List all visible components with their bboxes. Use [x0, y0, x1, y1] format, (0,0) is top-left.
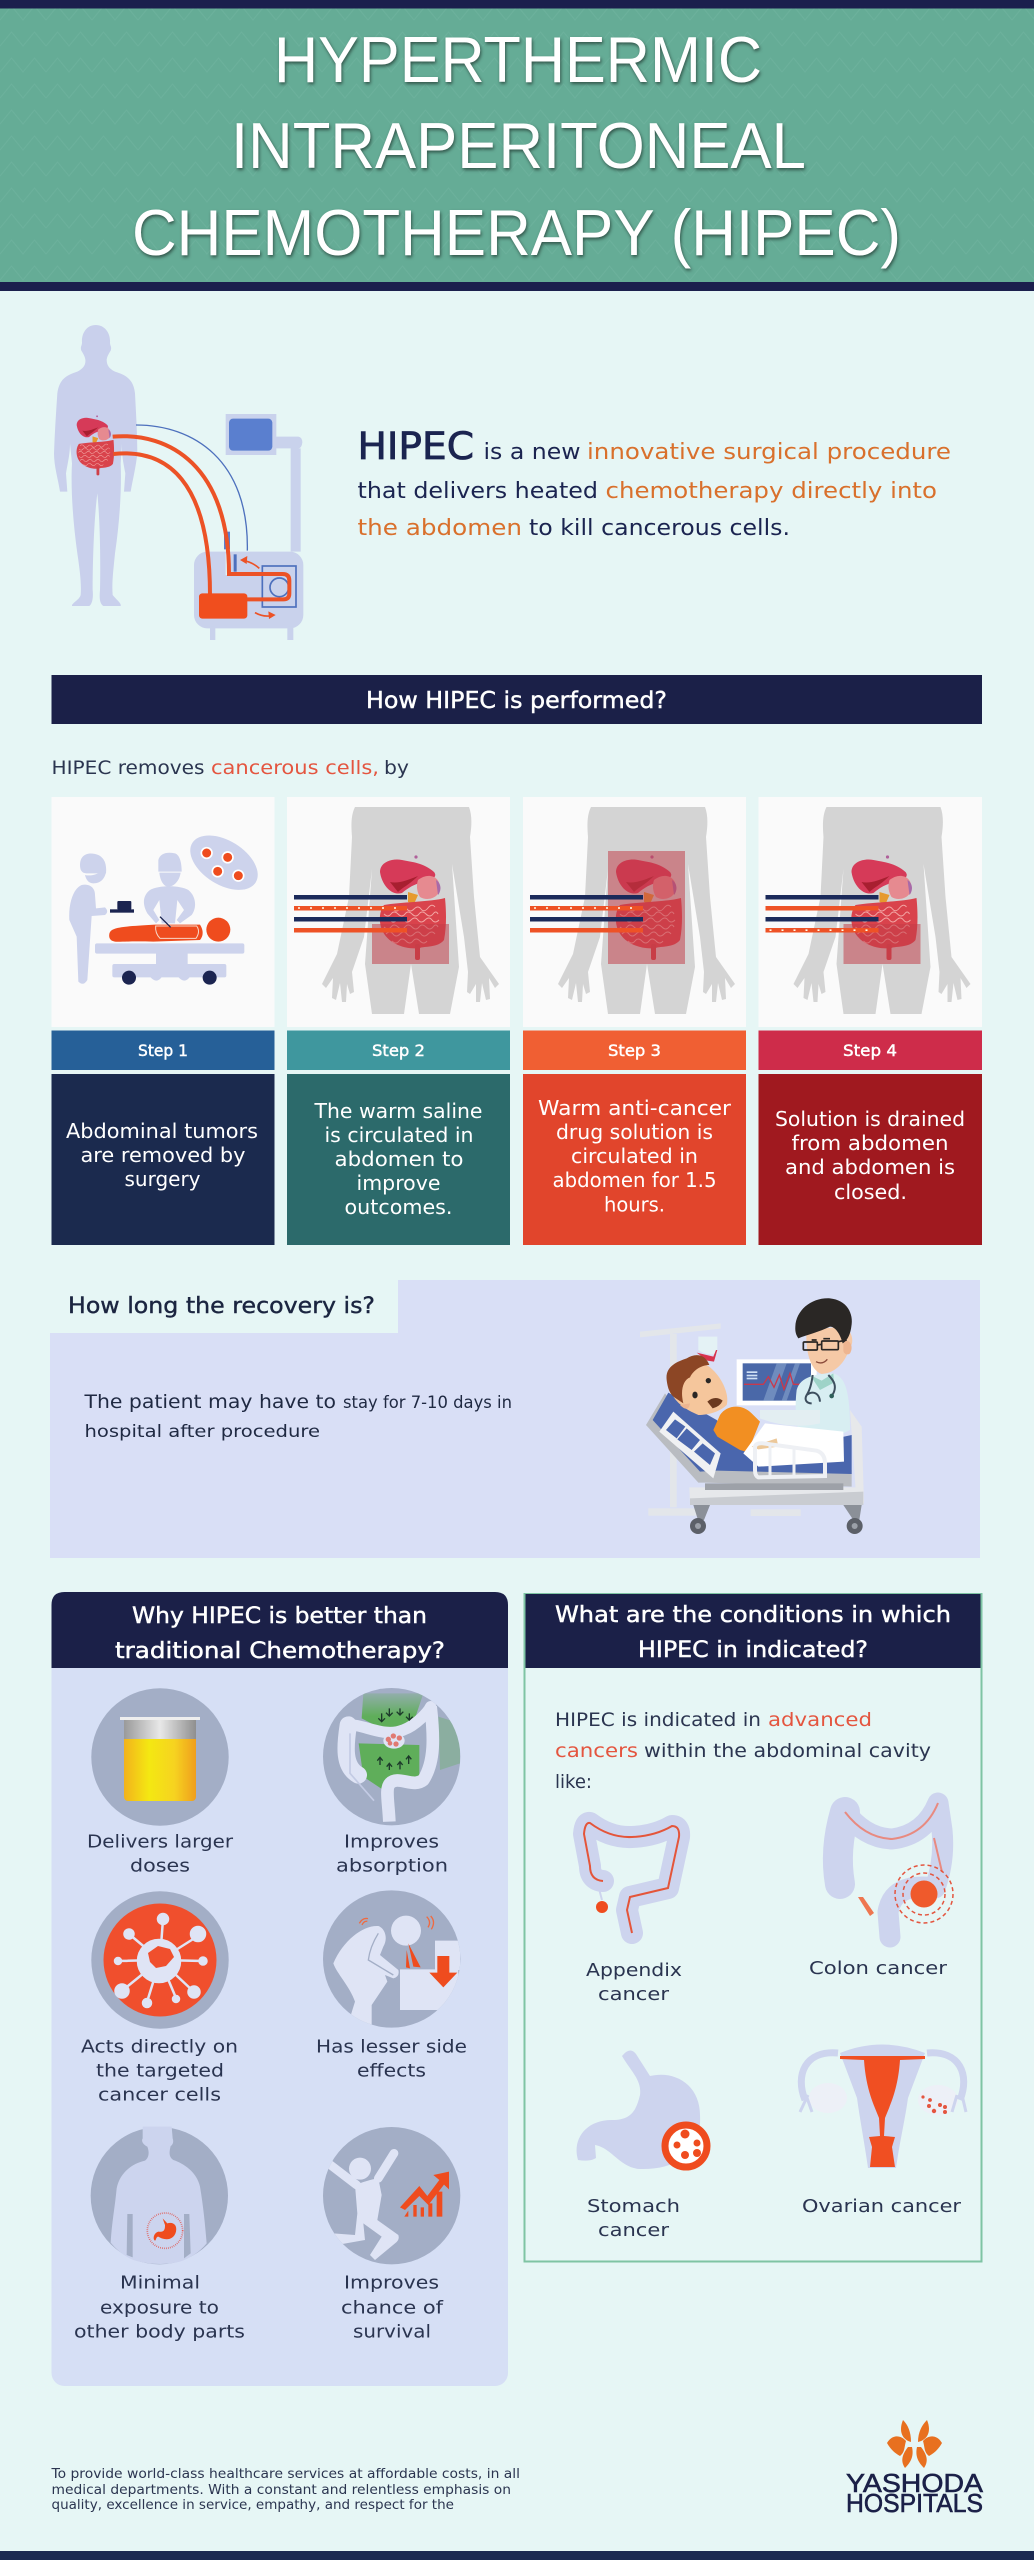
- step 4 card: from abdomen: [792, 1131, 948, 1155]
- recovery heading: How long the recovery is?: [68, 1294, 375, 1319]
- condition: colon cancer: [809, 1803, 953, 1979]
- step 4 card: and abdomen is: [785, 1155, 955, 1179]
- intro text: is a new: [484, 440, 581, 465]
- benefit: chance of survival: survival: [353, 2322, 431, 2342]
- intro text: cancers: [555, 1740, 638, 1762]
- recovery text: [83, 1391, 512, 1442]
- benefit: minimal exposure: other body parts: [74, 2322, 245, 2342]
- step 2 card: outcomes.: [344, 1195, 452, 1219]
- benefit: minimal exposure: Minimal: [120, 2272, 200, 2294]
- intro text: chemotherapy directly into: [606, 479, 937, 504]
- footer mission text: [50, 2466, 520, 2513]
- lead-in text: by: [384, 757, 409, 779]
- illustration: doctor and patient in bed: [640, 1298, 864, 1534]
- step 1 card: surgery: [124, 1167, 201, 1191]
- intro text: HIPEC is indicated in: [555, 1709, 761, 1731]
- panel heading: [52, 1592, 508, 1668]
- condition: appendix cancer: Appendix: [586, 1960, 682, 1981]
- title text: CHEMOTHERAPY (HIPEC): [132, 196, 901, 269]
- benefit: larger doses: [87, 1688, 234, 1876]
- icon: abdomen with saline tubes: [294, 807, 499, 1014]
- condition: ovarian cancer: [800, 2044, 966, 2217]
- step 4 card: Step 4: [843, 1041, 897, 1060]
- step 4 tab: [758, 1030, 982, 1070]
- step 1 card: [52, 797, 274, 1245]
- step 4 card: [758, 797, 982, 1245]
- step 2 card: improve: [356, 1171, 440, 1195]
- reservoir bag: [199, 593, 247, 619]
- step 2 card: [287, 797, 510, 1245]
- lead-in text: [52, 757, 409, 779]
- condition: colon cancer: Colon cancer: [809, 1958, 948, 1979]
- benefit: chance of survival: chance of: [341, 2298, 444, 2318]
- benefit: targeted cancer cells: cancer cells: [98, 2084, 221, 2106]
- icon: abdomen with drug solution: [530, 807, 735, 1014]
- condition: appendix cancer: cancer: [598, 1984, 670, 2005]
- benefit: chance of survival: [323, 2127, 460, 2342]
- step 4 card: Solution is drained: [775, 1107, 965, 1131]
- condition: stomach cancer: Stomach: [587, 2196, 680, 2217]
- step 3 card: [523, 797, 746, 1245]
- intro text: the abdomen: [358, 516, 522, 541]
- step 2 card: The warm saline: [313, 1099, 482, 1123]
- step 1 description: [52, 1074, 274, 1245]
- condition: appendix cancer: [584, 1823, 682, 2005]
- footer mission text: quality, excellence in service, empathy, and respect for the: [52, 2497, 454, 2513]
- illustration: patient connected to HIPEC machine: [54, 325, 303, 640]
- benefit: minimal exposure: [74, 2127, 245, 2342]
- recovery text: stay for 7-10 days in: [343, 1393, 512, 1413]
- benefit: chance of survival: Improves: [344, 2272, 439, 2294]
- icon: abdomen draining: [766, 807, 970, 1014]
- footer mission text: medical departments. With a constant and relentless emphasis on: [52, 2482, 511, 2498]
- condition: stomach cancer: [577, 2050, 707, 2241]
- benefit: absorption: [323, 1688, 460, 1876]
- monitor: [737, 1359, 817, 1405]
- step 1 card: Step 1: [138, 1041, 188, 1060]
- step 3 card: drug solution is: [556, 1120, 713, 1144]
- panel: conditions: [524, 1594, 982, 2262]
- benefit: targeted cancer cells: Acts directly on: [81, 2036, 238, 2058]
- step 3 tab: [523, 1030, 746, 1070]
- panel: recovery: [50, 1280, 980, 1558]
- step 2 card: abdomen to: [334, 1147, 464, 1171]
- flow arrows: [240, 556, 276, 619]
- benefit: absorption: Improves: [344, 1832, 439, 1852]
- benefit: absorption: absorption: [336, 1856, 448, 1876]
- panel heading: What are the conditions in which: [555, 1603, 951, 1628]
- icon: surgery scene: [69, 824, 267, 985]
- benefit: targeted cancer cells: [81, 1891, 238, 2106]
- lead-in text: cancerous cells,: [211, 757, 379, 779]
- panel heading: traditional Chemotherapy?: [115, 1639, 445, 1664]
- intro text: [358, 425, 951, 541]
- benefit: lesser side effects: [316, 1890, 467, 2082]
- bed frame: [646, 1393, 863, 1534]
- intro text: within the abdominal cavity: [644, 1740, 931, 1762]
- organs: [77, 415, 114, 475]
- panel: why HIPEC is better: [52, 1592, 508, 2386]
- step 3 description: [523, 1074, 746, 1245]
- intro text: innovative surgical procedure: [587, 440, 951, 465]
- intro text: advanced: [768, 1709, 872, 1731]
- step 2 card: is circulated in: [324, 1123, 474, 1147]
- recovery text: hospital after procedure: [84, 1422, 320, 1442]
- step 3 card: hours.: [604, 1192, 665, 1216]
- logo: Yashoda Hospitals: [846, 2420, 984, 2518]
- benefit: minimal exposure: exposure to: [100, 2298, 219, 2318]
- intro text: like:: [555, 1771, 592, 1793]
- step 3 card: Step 3: [608, 1041, 661, 1060]
- title text: [132, 23, 901, 269]
- tubes: [113, 425, 289, 599]
- section bar: how HIPEC is performed: [52, 675, 982, 724]
- logo: Yashoda Hospitals: YASHODA: [846, 2468, 984, 2498]
- title text: INTRAPERITONEAL: [231, 109, 806, 182]
- intro text: to kill cancerous cells.: [529, 516, 790, 541]
- section bar: how HIPEC is performed: How HIPEC is performed?: [366, 688, 667, 714]
- step 3 card: circulated in: [571, 1144, 698, 1168]
- benefit: lesser side effects: effects: [357, 2060, 426, 2082]
- stomach target: [147, 2213, 183, 2248]
- intro text: that delivers heated: [358, 479, 598, 504]
- title text: HYPERTHERMIC: [274, 23, 762, 96]
- panel heading: Why HIPEC is better than: [132, 1604, 427, 1629]
- intro text: [555, 1709, 931, 1793]
- step 1 card: are removed by: [80, 1143, 246, 1167]
- recovery text: The patient may have to: [83, 1391, 336, 1413]
- step 2 description: [287, 1074, 510, 1245]
- condition: ovarian cancer: Ovarian cancer: [802, 2196, 962, 2217]
- step 4 description: [758, 1074, 982, 1245]
- doctor: [760, 1298, 852, 1437]
- step 1 tab: [52, 1030, 274, 1070]
- footer bar: [0, 2551, 1034, 2560]
- step 1 card: Abdominal tumors: [66, 1119, 258, 1143]
- intro text: HIPEC: [358, 425, 474, 468]
- benefit: larger doses: Delivers larger: [87, 1832, 234, 1852]
- footer mission text: To provide world-class healthcare services at affordable costs, in all: [50, 2466, 520, 2482]
- lead-in text: HIPEC removes: [52, 757, 204, 779]
- benefit: targeted cancer cells: the targeted: [96, 2060, 224, 2082]
- title banner: [0, 0, 1034, 291]
- step 2 card: Step 2: [372, 1041, 425, 1060]
- step 2 tab: [287, 1030, 510, 1070]
- benefit: larger doses: doses: [130, 1856, 190, 1876]
- machine: [194, 414, 303, 640]
- panel heading: HIPEC in indicated?: [638, 1638, 868, 1663]
- logo: Yashoda Hospitals: HOSPITALS: [846, 2488, 983, 2518]
- step 3 card: Warm anti-cancer: [538, 1096, 732, 1120]
- step 3 card: abdomen for 1.5: [552, 1168, 716, 1192]
- panel heading: [526, 1594, 980, 1668]
- patient: [667, 1355, 844, 1477]
- benefit: lesser side effects: Has lesser side: [316, 2036, 467, 2058]
- step 4 card: closed.: [834, 1180, 907, 1204]
- condition: stomach cancer: cancer: [598, 2220, 670, 2241]
- icon: flower: [887, 2420, 942, 2468]
